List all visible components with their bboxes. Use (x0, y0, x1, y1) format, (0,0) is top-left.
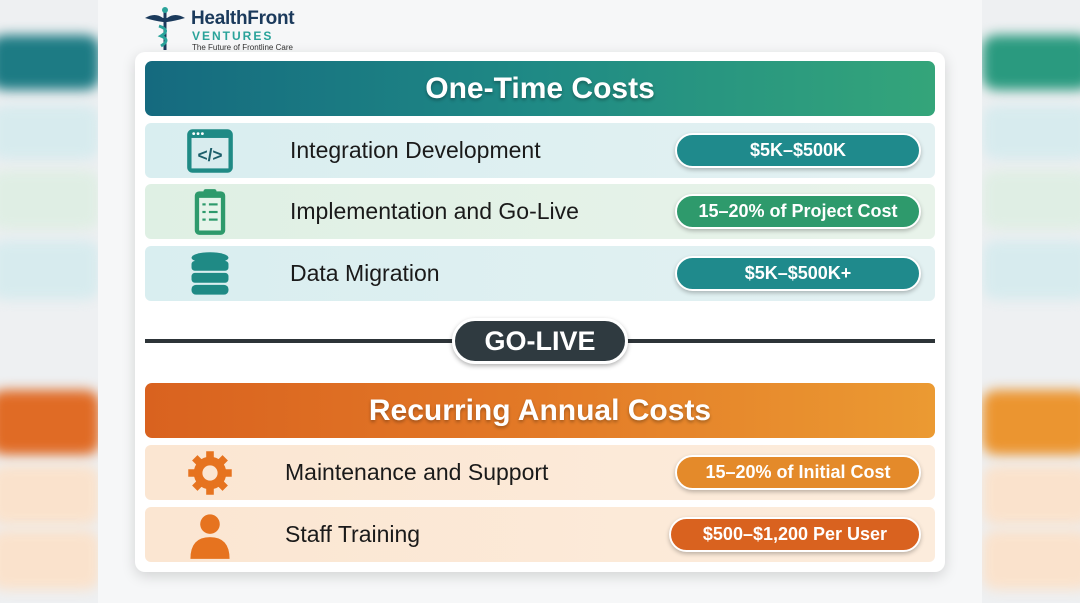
pill: 15–20% of Project Cost (698, 201, 898, 221)
pill (669, 517, 921, 552)
header: One-Time Costs (145, 61, 935, 116)
icon: code window (187, 129, 233, 173)
row: Integration Development (145, 123, 935, 178)
pill (675, 194, 921, 229)
row: Implementation (145, 184, 935, 239)
row: Data Migration: Data Migration (290, 260, 440, 286)
icon: person (190, 514, 230, 559)
header: One-Time Costs: One-Time Costs (425, 72, 655, 105)
row: Integration Development: Integration Development (290, 137, 541, 163)
row: Maintenance: Maintenance and Support (285, 459, 548, 485)
logo: VENTURES (192, 29, 273, 43)
header: Recurring Annual Costs (145, 383, 935, 438)
header: Recurring Annual Costs: Recurring Annual Costs (369, 394, 711, 427)
pill: $5K–$500K+ (745, 263, 851, 283)
pill: $500–$1,200 Per User (703, 524, 887, 544)
blurred background left (0, 24, 98, 595)
logo (145, 7, 294, 52)
pill (675, 256, 921, 291)
pill: 15–20% of Initial Cost (705, 462, 891, 482)
icon: gear (188, 451, 232, 495)
icon: code window: </> (197, 145, 223, 165)
logo: HealthFront (191, 8, 294, 29)
pill: $5K–$500K (750, 140, 846, 160)
divider: GO-LIVE (145, 317, 935, 369)
logo: The Future of Frontline Care (192, 43, 293, 52)
icon: clipboard (194, 189, 226, 235)
row: Staff Training (145, 507, 935, 562)
pill (675, 133, 921, 168)
row: Data Migration (145, 246, 935, 301)
row: Implementation: Implementation and Go-Live (290, 198, 579, 224)
row: Staff Training: Staff Training (285, 521, 420, 547)
row: Maintenance (145, 445, 935, 500)
pill (675, 455, 921, 490)
main card (135, 52, 945, 572)
blurred background right (982, 25, 1080, 595)
divider: GO-LIVE: GO-LIVE (484, 326, 596, 356)
icon: database (192, 252, 228, 295)
